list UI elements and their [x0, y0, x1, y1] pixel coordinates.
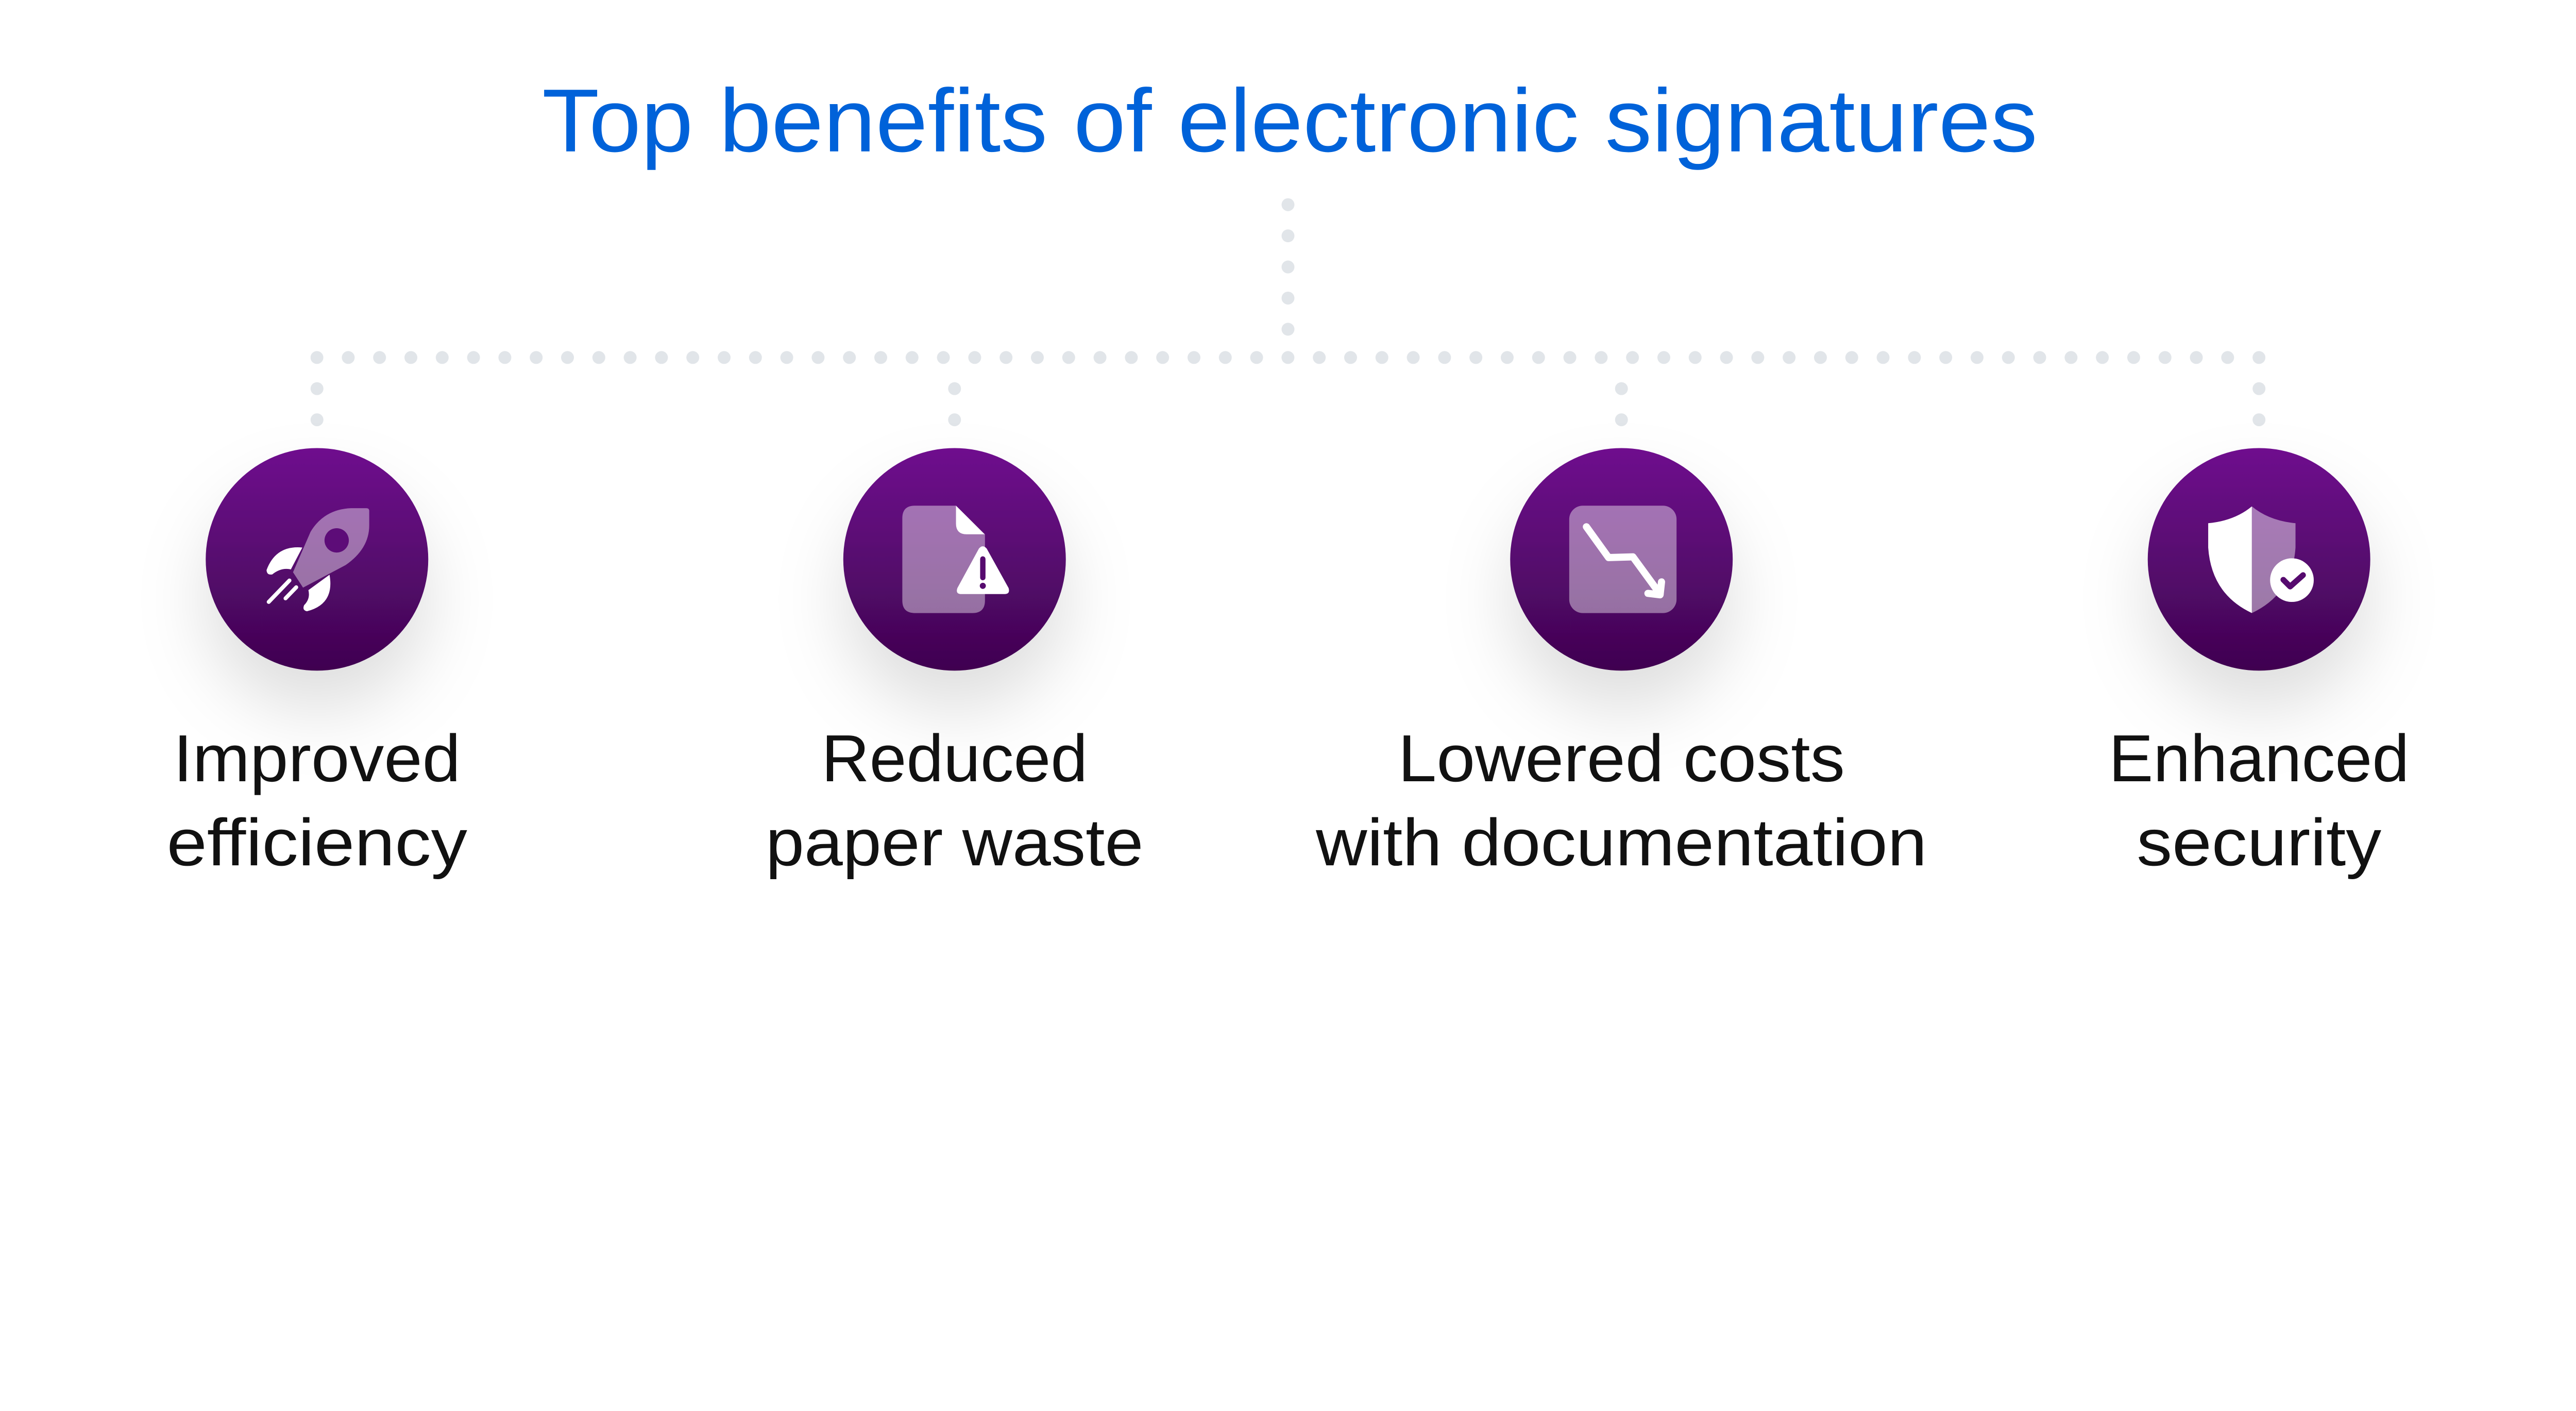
- label: enhanced security: security: [2137, 805, 2382, 880]
- title: Top benefits of electronic signatures: [542, 71, 2038, 171]
- panel: improved efficiency: [167, 448, 467, 880]
- label: reduced paper waste: Reduced: [821, 721, 1088, 796]
- label: reduced paper waste: paper waste: [766, 805, 1143, 880]
- label: improved efficiency: Improved: [173, 721, 461, 796]
- connector: dotted tree lines: [311, 198, 2265, 426]
- panel: lowered costs: [1315, 448, 1927, 880]
- icon: document with warning: [843, 448, 1066, 670]
- icon: downward chart: [1510, 448, 1733, 670]
- panel: reduced paper waste: [766, 448, 1143, 880]
- label: improved efficiency: efficiency: [167, 805, 467, 880]
- icon: rocket circle: [206, 448, 428, 670]
- label: lowered costs with documentation: Lowered costs: [1398, 721, 1845, 796]
- label: lowered costs with documentation: with documentation: [1315, 805, 1927, 880]
- icon: shield with check: [2148, 448, 2370, 670]
- panel: enhanced security: [2109, 448, 2409, 880]
- label: enhanced security: Enhanced: [2109, 721, 2409, 796]
